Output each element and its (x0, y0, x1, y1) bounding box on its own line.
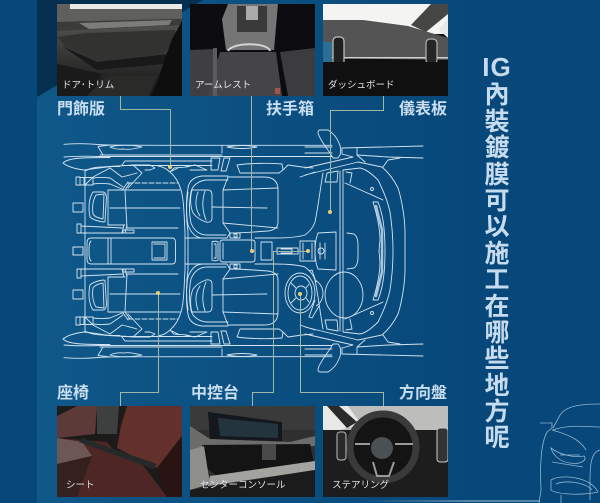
caption: dashboard: ダッシュボード (328, 80, 395, 91)
photo: seat (57, 406, 182, 497)
photo: centre console (190, 406, 315, 497)
vertical title: 內 (484, 81, 510, 109)
heading: dashboard: 儀表板 (399, 101, 447, 118)
photo: steering wheel (323, 406, 448, 497)
vertical title: 可 (484, 187, 510, 215)
vertical title: IG (482, 52, 512, 82)
vertical title: 裝 (484, 108, 510, 136)
caption: armrest: アームレスト (195, 80, 251, 91)
vertical title: 些 (484, 345, 510, 373)
vertical title: 地 (484, 372, 510, 400)
vertical title: 在 (484, 293, 510, 321)
heading: centre console: 中控台 (191, 385, 239, 402)
photo: door trim (57, 4, 182, 96)
caption: seat: シート (66, 480, 95, 491)
vertical title (482, 52, 512, 452)
vertical title: 以 (484, 213, 510, 241)
caption: steering wheel: ステアリング (332, 480, 389, 491)
vertical title: 方 (484, 398, 510, 426)
vertical title: 鍍 (484, 134, 510, 162)
heading: door trim: 門飾版 (57, 101, 105, 118)
vertical title: 膜 (484, 161, 510, 189)
vertical title: 工 (484, 266, 510, 294)
heading: seat: 座椅 (57, 385, 89, 402)
car outline upper half (63, 130, 423, 255)
car outline lower half (63, 247, 423, 372)
caption: centre console: センターコンソール (200, 480, 286, 491)
photo: dashboard (323, 4, 448, 96)
heading: steering wheel: 方向盤 (399, 385, 447, 402)
vertical title: 呢 (484, 424, 510, 452)
vertical title: 施 (484, 240, 510, 268)
vertical title: 哪 (484, 319, 510, 347)
photo: armrest (190, 4, 315, 96)
heading: armrest: 扶手箱 (266, 101, 314, 118)
caption: door trim: ドア･トリム (62, 80, 114, 91)
